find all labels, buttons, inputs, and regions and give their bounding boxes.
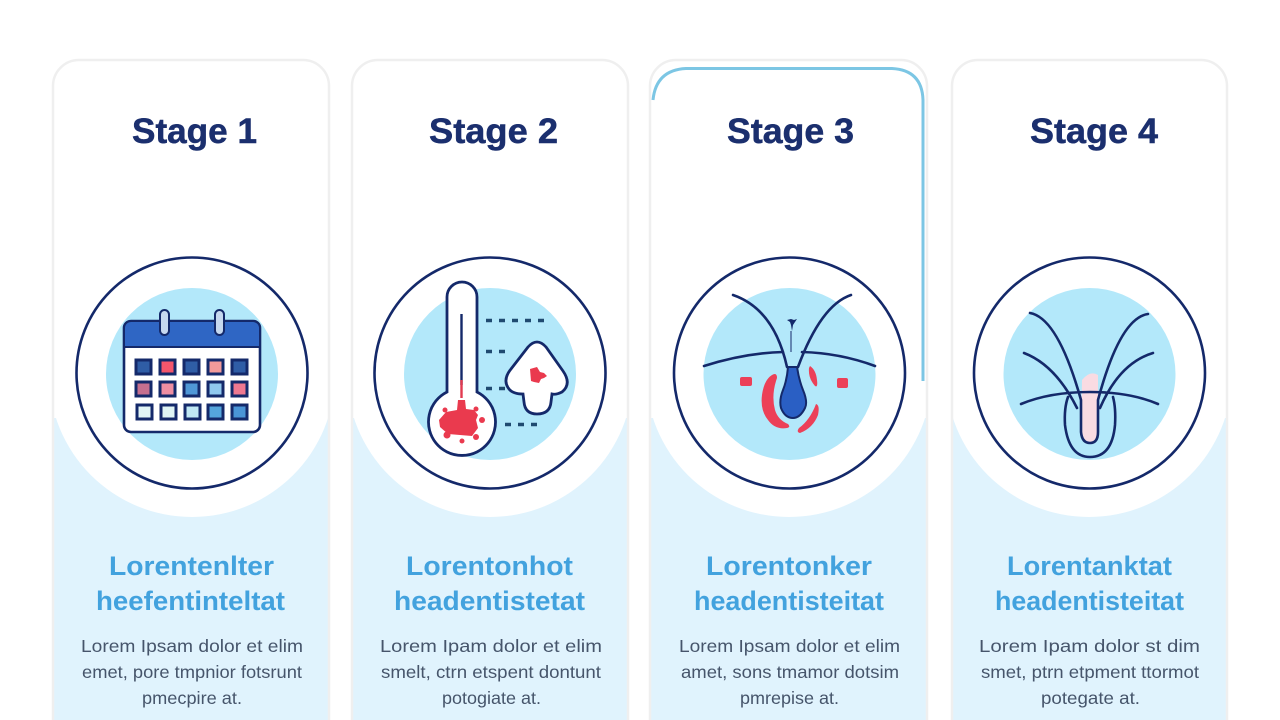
panel: stage 1 bbox=[49, 60, 335, 720]
icon: healthy hair follicle bbox=[974, 258, 1205, 488]
subheading: stage 4: headentisteitat bbox=[995, 586, 1184, 616]
text block: stage 1: emet, pore tmpnior fotsrunt bbox=[82, 662, 302, 682]
panel: stage 2 bbox=[347, 60, 633, 720]
subheading: stage 2 bbox=[394, 551, 585, 616]
text block: stage 4: Lorem Ipam dolor st dim bbox=[979, 636, 1200, 656]
text block: stage 2: potogiate at. bbox=[442, 688, 541, 708]
text block: stage 4: potegate at. bbox=[1041, 688, 1140, 708]
subheading: stage 2: headentistetat bbox=[394, 586, 585, 616]
subheading: stage 1: heefentinteltat bbox=[96, 586, 285, 616]
icon: hair follicle inflamed bbox=[674, 258, 905, 488]
subheading: stage 4 bbox=[995, 551, 1184, 616]
subheading: stage 1: Lorentenlter bbox=[109, 551, 275, 581]
text block: stage 2 bbox=[380, 636, 602, 708]
subheading: stage 3 bbox=[694, 551, 884, 616]
subheading: stage 3: Lorentonker bbox=[706, 551, 873, 581]
subheading: stage 4: Lorentanktat bbox=[1007, 551, 1172, 581]
text block: stage 4: smet, ptrn etpment ttormot bbox=[981, 662, 1199, 682]
text block: stage 3: Lorem Ipsam dolor et elim bbox=[679, 636, 900, 656]
heading: stage 1: Stage 1 bbox=[132, 112, 257, 151]
text block: stage 3 bbox=[679, 636, 900, 708]
text block: stage 2: smelt, ctrn etspent dontunt bbox=[381, 662, 601, 682]
icon: thermometer bbox=[374, 258, 606, 488]
text block: stage 1: pmecpire at. bbox=[142, 688, 242, 708]
text block: stage 1 bbox=[81, 636, 303, 708]
panel: stage 4 bbox=[946, 60, 1232, 720]
text block: stage 3: amet, sons tmamor dotsim bbox=[681, 662, 899, 682]
subheading: stage 1 bbox=[96, 551, 285, 616]
icon: calendar bbox=[76, 258, 308, 488]
accent line bbox=[653, 68, 923, 381]
subheading: stage 3: headentisteitat bbox=[694, 586, 884, 616]
heading: stage 3: Stage 3 bbox=[727, 112, 854, 151]
panel: stage 3 bbox=[646, 60, 932, 720]
text block: stage 4 bbox=[979, 636, 1200, 708]
text block: stage 1: Lorem Ipsam dolor et elim bbox=[81, 636, 303, 656]
text block: stage 3: pmrepise at. bbox=[740, 688, 839, 708]
text block: stage 2: Lorem Ipam dolor et elim bbox=[380, 636, 602, 656]
subheading: stage 2: Lorentonhot bbox=[406, 551, 573, 581]
heading: stage 4: Stage 4 bbox=[1030, 112, 1159, 151]
heading: stage 2: Stage 2 bbox=[429, 112, 558, 151]
